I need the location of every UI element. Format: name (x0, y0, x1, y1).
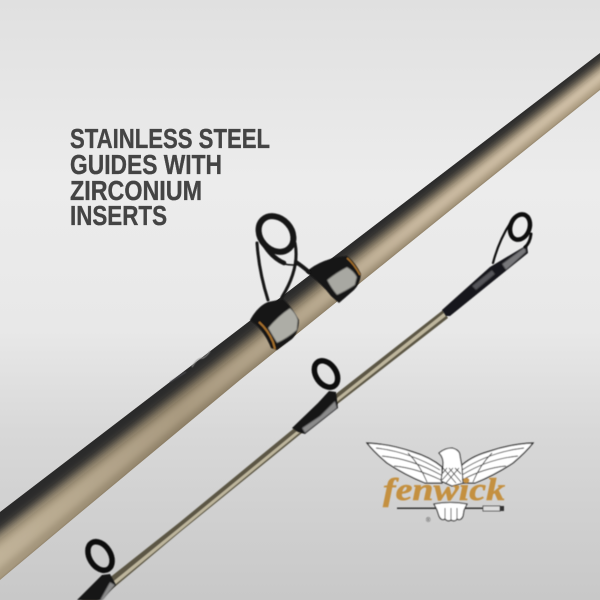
fenwick wordmark: fenwick (383, 471, 505, 507)
main rod upper guide wrap (306, 256, 361, 303)
thin rod middle wrap (292, 391, 338, 434)
fenwick eagle logo (367, 443, 533, 524)
heading: stainless steel guides with zirconium inserts: ZIRCONIUM (70, 175, 202, 206)
thin rod middle guide (309, 356, 343, 392)
eagle left wing (367, 443, 442, 483)
thin rod blank (80, 310, 448, 600)
rod logo mark (170, 351, 210, 382)
heading: stainless steel guides with zirconium inserts: GUIDES WITH (70, 149, 222, 180)
wing feather lines (376, 448, 524, 483)
heading: stainless steel guides with zirconium inserts: INSERTS (70, 200, 167, 231)
thin rod bottom wrap (77, 574, 116, 600)
thin rod tip wrap (442, 245, 528, 316)
rod under wordmark (397, 506, 504, 511)
heading: stainless steel guides with zirconium inserts (70, 123, 270, 231)
thin rod bottom guide (83, 537, 117, 575)
eagle body and head (439, 448, 463, 486)
large stripping guide (251, 209, 309, 300)
main rod lower guide wrap (250, 299, 299, 350)
thin rod tip guide (493, 212, 533, 263)
eagle right wing (460, 443, 533, 483)
heading: stainless steel guides with zirconium inserts: STAINLESS STEEL (70, 123, 270, 154)
registered mark: ® (426, 517, 431, 524)
talons (434, 502, 467, 521)
